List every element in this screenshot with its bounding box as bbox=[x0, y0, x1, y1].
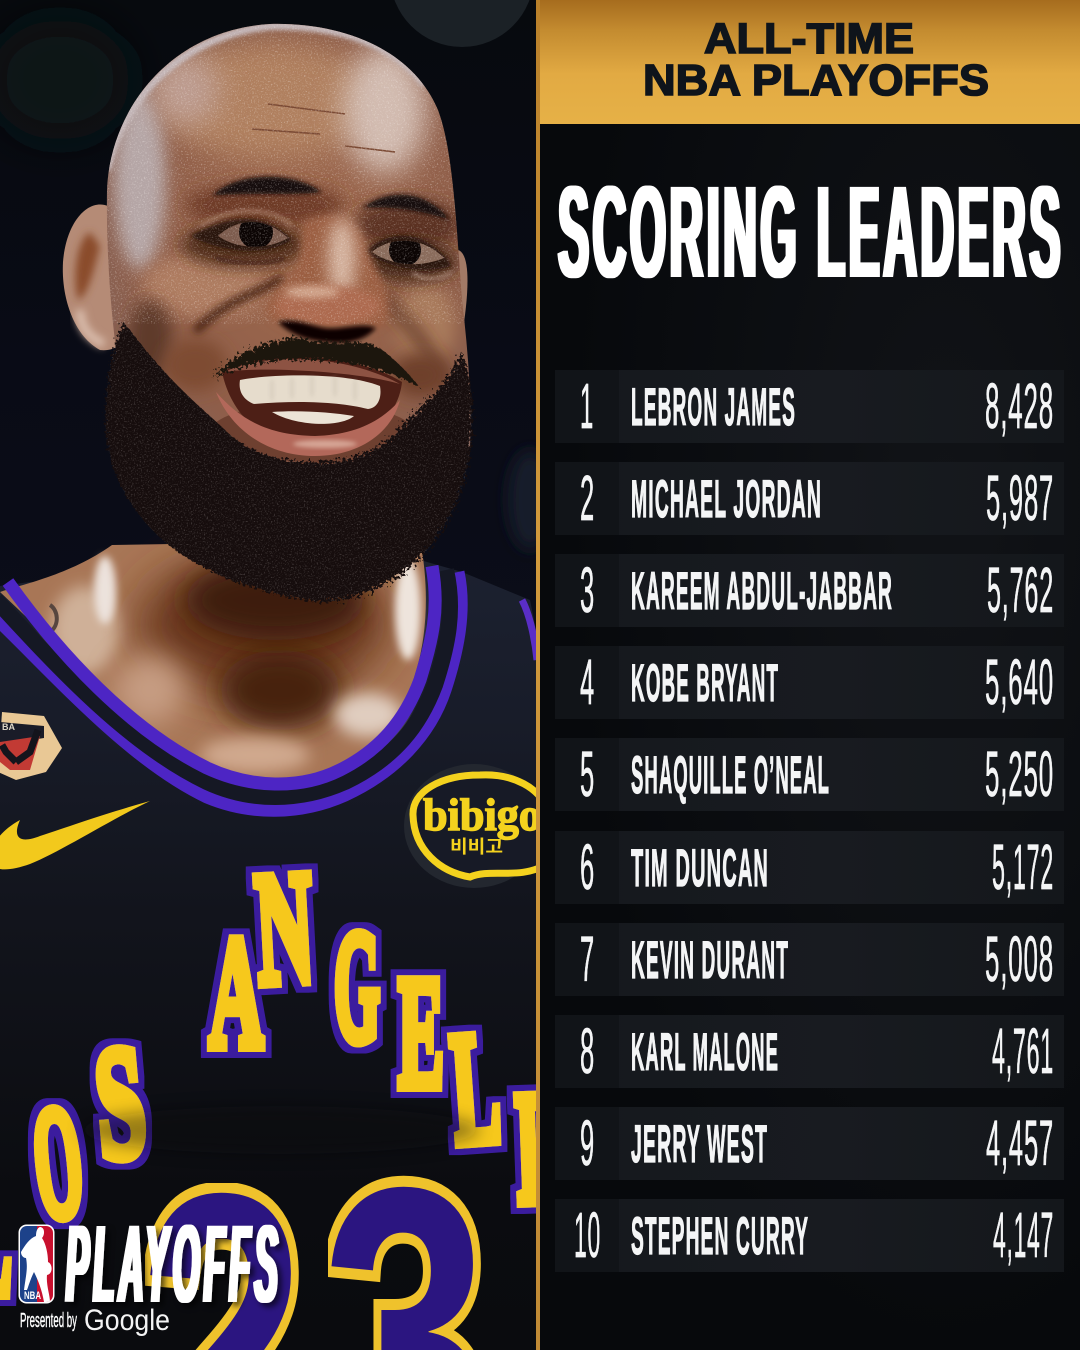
eyes bbox=[190, 210, 452, 279]
nose bbox=[267, 216, 389, 343]
bibigo sponsor patch: 비비고 bbox=[450, 837, 503, 857]
NBA Playoffs logo bbox=[18, 1224, 287, 1336]
neck and chest bbox=[0, 540, 426, 792]
row 2: 2 bbox=[580, 462, 595, 534]
row 10: 10 bbox=[574, 1199, 601, 1271]
header line 2: NBA PLAYOFFS bbox=[643, 56, 989, 105]
row 7: KEVIN DURANT bbox=[631, 931, 789, 990]
panel: right background bbox=[540, 124, 1080, 1350]
sweat speckle on scalp and face bbox=[105, 24, 465, 324]
NBA logo badge bbox=[18, 1224, 54, 1304]
bibigo sponsor patch bbox=[404, 764, 545, 888]
bibigo sponsor patch: bibigo bbox=[423, 790, 541, 840]
jersey number 23 bbox=[145, 1176, 481, 1350]
nike swoosh bbox=[0, 801, 150, 869]
jersey lettering: LOS ANGELES: N bbox=[252, 839, 317, 1019]
collar bbox=[0, 566, 537, 810]
jersey lettering: LOS ANGELES: E bbox=[513, 1058, 565, 1237]
right eyelid bbox=[365, 235, 452, 270]
Google: Google bbox=[84, 1304, 170, 1337]
eyebrows bbox=[212, 177, 450, 220]
head bbox=[100, 24, 480, 610]
panel: player portrait bbox=[0, 0, 565, 1350]
jersey lettering: LOS ANGELES: A bbox=[209, 905, 263, 1082]
cheek shading bbox=[128, 183, 462, 397]
row 2 bbox=[555, 462, 1064, 535]
photo backdrop bbox=[0, 0, 552, 620]
row 3: 3 bbox=[580, 554, 595, 626]
row 5: 5 bbox=[580, 738, 595, 810]
text: PLAYOFFS bbox=[66, 1203, 282, 1326]
forehead shading bbox=[107, 26, 427, 270]
mustache bbox=[212, 338, 420, 388]
row 8: KARL MALONE bbox=[631, 1023, 779, 1082]
row 9: 9 bbox=[580, 1107, 595, 1179]
jersey lettering: LOS ANGELES: E bbox=[398, 943, 444, 1121]
header banner bbox=[540, 0, 1080, 124]
gold divider stripe bbox=[536, 0, 540, 1350]
jersey patch: 75 seasons: BA bbox=[2, 722, 15, 732]
jersey lettering: LOS ANGELES: O bbox=[25, 1072, 91, 1253]
row 10 bbox=[555, 1199, 1064, 1272]
jersey lettering: LOS ANGELES bbox=[0, 863, 536, 1306]
beard highlights bbox=[106, 324, 472, 602]
row 5 bbox=[555, 738, 1064, 811]
row 4: 4 bbox=[580, 646, 595, 718]
row 8 bbox=[555, 1015, 1064, 1088]
row 9: JERRY WEST bbox=[631, 1115, 768, 1174]
NBA logo badge: NBA bbox=[24, 1290, 41, 1302]
row 1: 1 bbox=[580, 370, 594, 442]
left eyelid bbox=[200, 211, 292, 226]
jersey patch: 75 seasons bbox=[0, 712, 62, 780]
jersey lettering: LOS ANGELES: L bbox=[446, 998, 505, 1178]
row 7 bbox=[555, 923, 1064, 996]
NBA Playoffs logo: Presented by bbox=[20, 1310, 77, 1332]
row 1 bbox=[555, 370, 1064, 443]
row 6: 6 bbox=[580, 831, 595, 903]
leaderboard table bbox=[555, 370, 1064, 1272]
mouth bbox=[216, 357, 402, 456]
row 7: 7 bbox=[580, 923, 595, 995]
row 1: LEBRON JAMES bbox=[631, 378, 796, 437]
row 4: KOBE BRYANT bbox=[631, 654, 779, 713]
jersey body bbox=[0, 561, 536, 1098]
dark shading over lower jersey bbox=[80, 1106, 480, 1154]
row 3 bbox=[555, 554, 1064, 627]
header line 1: ALL-TIME bbox=[704, 15, 914, 63]
jersey lettering: LOS ANGELES: G bbox=[334, 899, 380, 1076]
ears bbox=[63, 204, 467, 350]
row 6 bbox=[555, 831, 1064, 904]
row 6: TIM DUNCAN bbox=[631, 839, 769, 898]
row 9 bbox=[555, 1107, 1064, 1180]
jersey lettering: LOS ANGELES: S bbox=[89, 1011, 152, 1193]
beard bbox=[106, 322, 472, 602]
row 8: 8 bbox=[580, 1015, 595, 1087]
row 4 bbox=[555, 646, 1064, 719]
skin below the lip bbox=[216, 412, 408, 467]
